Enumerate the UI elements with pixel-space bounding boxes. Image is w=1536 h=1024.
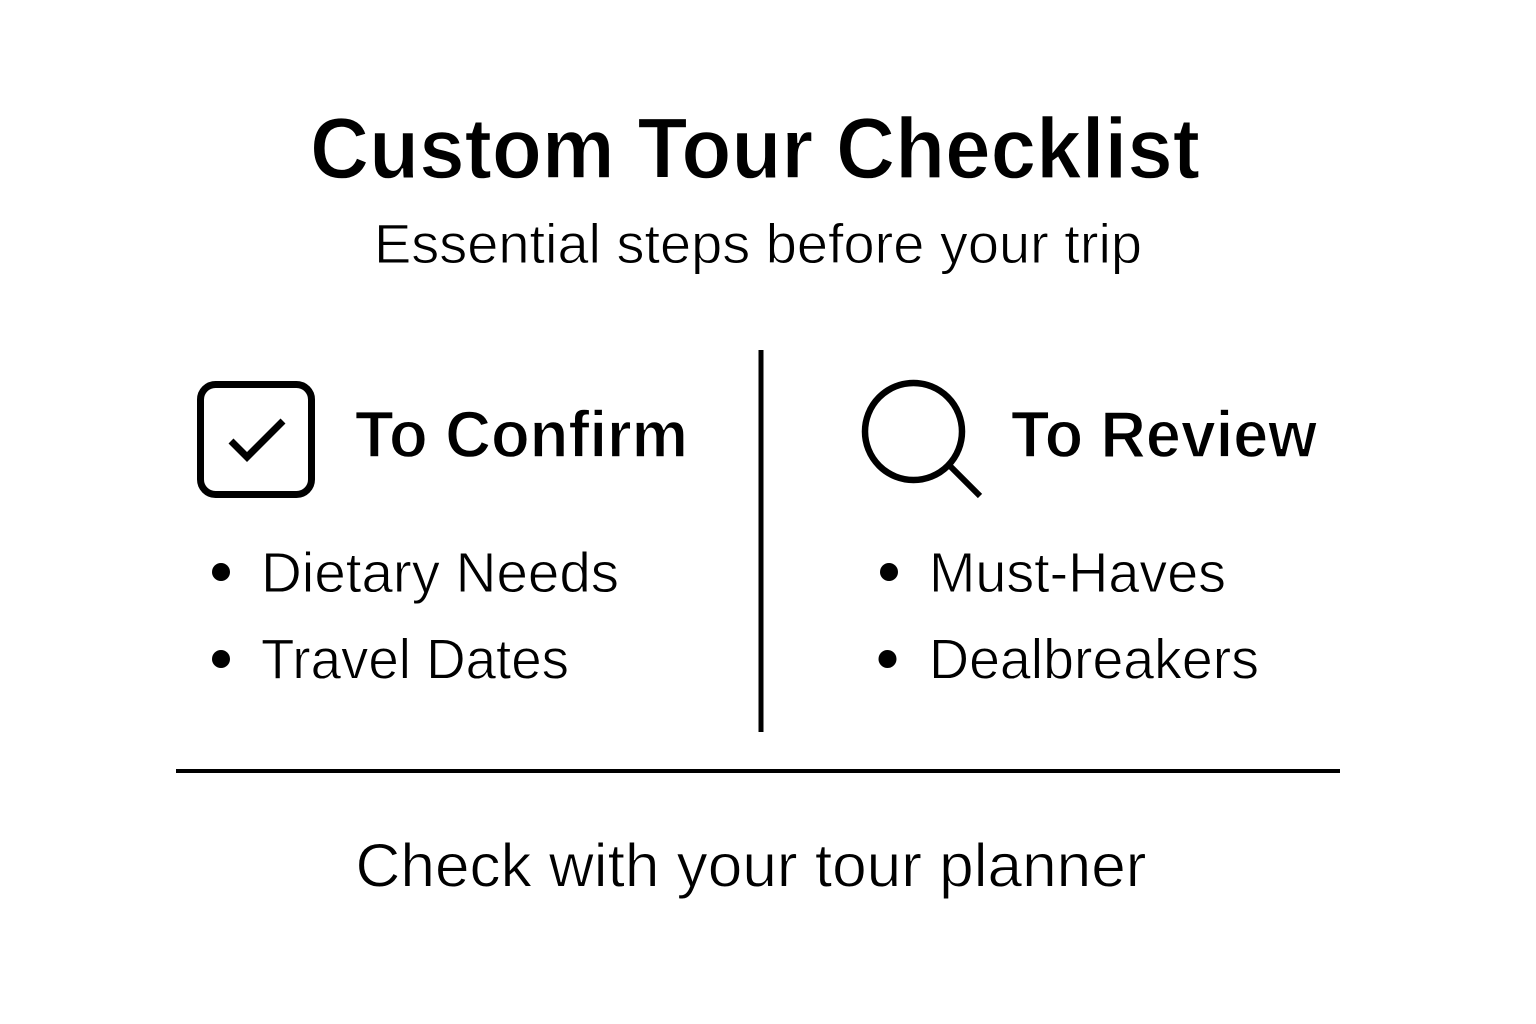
heading: to confirm: To Confirm: [355, 397, 688, 471]
bullet: dietary needs: Dietary Needs: [261, 541, 619, 605]
panel: to review: [865, 383, 1318, 692]
subtitle: Essential steps before your trip: [374, 212, 1142, 275]
panel: to confirm: [200, 384, 688, 692]
footer note: Check with your tour planner: [356, 832, 1146, 900]
bullet: must-haves: Must-Haves: [929, 541, 1226, 605]
heading: to review: To Review: [1011, 397, 1318, 471]
icon: magnifying glass: [865, 383, 980, 496]
icon: checkbox with check mark: [200, 384, 312, 494]
title: Custom Tour Checklist: [310, 101, 1200, 197]
bullet: travel dates: Travel Dates: [261, 628, 569, 692]
bullet: dealbreakers: Dealbreakers: [929, 628, 1259, 692]
